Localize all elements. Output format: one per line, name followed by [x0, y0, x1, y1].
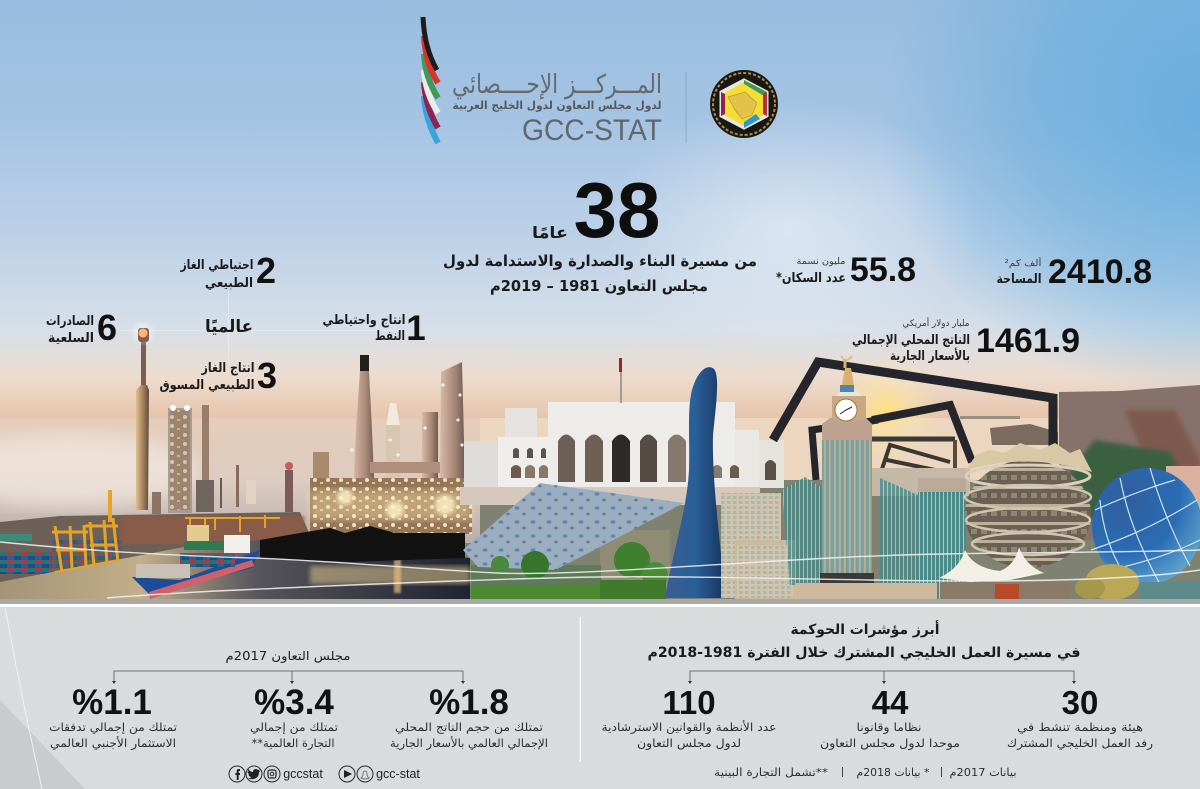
stat: organisations: 30	[1062, 684, 1098, 721]
palm trees	[1075, 564, 1200, 600]
stat: unified laws: نظاما وقانونا	[856, 720, 922, 735]
building: glass sphere	[1091, 468, 1200, 584]
word: years: عامًا	[532, 223, 568, 242]
garden	[471, 530, 670, 599]
rank 1	[322, 309, 426, 348]
rank 1: انتاج واحتياطي	[322, 313, 406, 328]
rank 2: الطبيعي	[205, 276, 253, 291]
logo: GCC-STAT	[423, 17, 778, 147]
building: twisted tower	[665, 367, 726, 598]
rank 2	[180, 250, 276, 291]
mountain and coast	[960, 385, 1200, 540]
rank 2: 2	[256, 250, 276, 291]
flare flame	[133, 323, 153, 343]
garden trees	[491, 542, 668, 599]
dark steel frames	[773, 362, 1053, 480]
container ship	[132, 525, 260, 599]
cross lines around the global label	[120, 290, 400, 362]
icon: coloured ribbon	[423, 17, 438, 143]
port cranes	[52, 490, 280, 572]
sunset glow	[830, 355, 940, 465]
logo GCC-STAT wordmark: GCC-STAT	[522, 114, 662, 147]
rank 2: احتياطي الغاز	[180, 258, 254, 273]
rank 3: الطبيعي المسوق	[160, 378, 254, 393]
panel: GCC 2017 shares	[49, 649, 548, 751]
bracket arrows	[688, 671, 1076, 684]
rank 3	[160, 355, 277, 396]
stat: population	[776, 251, 916, 289]
stat: regulations	[602, 684, 776, 751]
stat: GDP: بالأسعار الجارية	[890, 347, 970, 364]
footnotes: بيانات 2017م	[950, 766, 1016, 779]
bracket arrows	[112, 671, 465, 684]
heading line 1: أبرز مؤشرات الحوكمة	[790, 620, 940, 638]
stat: FDI share: %1.1	[72, 683, 152, 722]
hotel towers	[721, 477, 966, 600]
rank 1: 1	[406, 309, 426, 348]
stat: organisations: هيئة ومنظمة تنشط في	[1017, 720, 1143, 735]
stat: GDP: 1461.9	[976, 322, 1080, 360]
rank 3: 3	[257, 355, 277, 396]
far buildings ground	[870, 468, 970, 496]
stat: trade share: التجارة العالمية**	[252, 736, 334, 751]
headline line 1: من مسيرة البناء والصدارة والاستدامة لدول	[443, 252, 757, 270]
stat: trade share: تمتلك من إجمالي	[250, 720, 338, 735]
number 38: 38	[574, 166, 660, 254]
social media handles	[229, 766, 420, 782]
collage base colour	[465, 480, 1200, 600]
stat: FDI share: الاستثمار الأجنبي العالمي	[50, 736, 176, 751]
stat: unified laws	[820, 684, 960, 751]
footnotes: **تشمل التجارة البينية	[714, 766, 829, 779]
horizon haze and left sea	[0, 418, 1080, 543]
headline: 38 years	[443, 166, 757, 295]
logo Arabic subtitle: لدول مجلس التعاون لدول الخليج العربية	[452, 99, 662, 112]
stat: FDI share	[49, 683, 177, 751]
clock tower	[820, 356, 874, 595]
stat: GDP share	[390, 683, 548, 751]
stat: GDP: الناتج المحلي الإجمالي	[852, 333, 970, 348]
heading line 2: في مسيرة العمل الخليجي المشترك خلال الفترة 1981-2018م	[648, 645, 1080, 661]
label: globally: عالميًا	[205, 317, 253, 337]
stat: area: 2410.8	[1048, 253, 1152, 291]
refinery: left stacks	[136, 342, 293, 514]
stat: population: 55.8	[850, 251, 916, 289]
sky background	[0, 0, 1200, 425]
building: round tower	[965, 443, 1092, 568]
global rankings	[46, 250, 426, 396]
handle gcc-stat: gcc-stat	[376, 767, 420, 781]
stat: area: ألف كم²	[1005, 257, 1042, 269]
stat: population: عدد السكان*	[776, 271, 846, 286]
rank 1: النفط	[375, 329, 405, 344]
heading: مجلس التعاون 2017م	[225, 649, 350, 664]
icon: GCC emblem	[710, 70, 778, 138]
building: opera house	[460, 358, 784, 505]
stat: area	[996, 253, 1152, 291]
logo Arabic name: المـــركـــز الإحــــصائي	[452, 70, 662, 100]
handle gccstat: gccstat	[283, 767, 323, 781]
stat: regulations: 110	[662, 684, 716, 721]
stat: trade share: %3.4	[254, 683, 334, 722]
stat: regulations: لدول مجلس التعاون	[637, 736, 741, 751]
building: blue shell	[463, 483, 684, 570]
rank 6	[46, 307, 117, 348]
wavy white lines	[0, 542, 1200, 598]
bottom strip	[0, 599, 1200, 607]
stat: GDP share: %1.8	[429, 683, 509, 722]
water	[0, 540, 470, 600]
footnotes: * بيانات 2018م	[856, 766, 930, 779]
rank 3: انتاج الغاز	[201, 361, 254, 376]
panel: governance indicators	[602, 620, 1153, 751]
stat: unified laws: 44	[872, 684, 909, 721]
stat: GDP: مليار دولار أمريكي	[902, 317, 970, 329]
rank 6: الصادرات	[46, 314, 94, 329]
stat: unified laws: موحدا لدول مجلس التعاون	[820, 736, 960, 751]
rank 6: السلعية	[48, 331, 94, 346]
panel: bottom background	[0, 607, 1200, 789]
stat: population: مليون نسمة	[796, 257, 846, 267]
low palace wall	[795, 583, 937, 599]
stat: regulations: عدد الأنظمة والقوانين الاسترشادية	[602, 720, 776, 735]
footnotes	[714, 766, 1016, 779]
stat: GDP	[852, 317, 1080, 364]
stat: trade share	[250, 683, 338, 751]
stat: FDI share: تمتلك من إجمالي تدفقات	[49, 720, 177, 735]
stat: GDP share: تمتلك من حجم الناتج المحلي	[395, 720, 543, 735]
photo collage	[0, 323, 1200, 600]
stat: area: المساحة	[996, 272, 1042, 287]
port: ground and containers	[0, 512, 310, 590]
stat: GDP share: الإجمالي العالمي بالأسعار الجارية	[390, 736, 548, 751]
rank 6: 6	[97, 307, 117, 348]
white tents	[939, 547, 1070, 599]
refinery: main plant	[310, 355, 472, 534]
stat: organisations: رفد العمل الخليجي المشترك	[1007, 736, 1153, 751]
headline line 2: مجلس التعاون 1981 – 2019م	[490, 277, 708, 295]
building: pink block	[1166, 466, 1200, 528]
stat: organisations	[1007, 684, 1153, 751]
dark tree line	[260, 526, 465, 562]
